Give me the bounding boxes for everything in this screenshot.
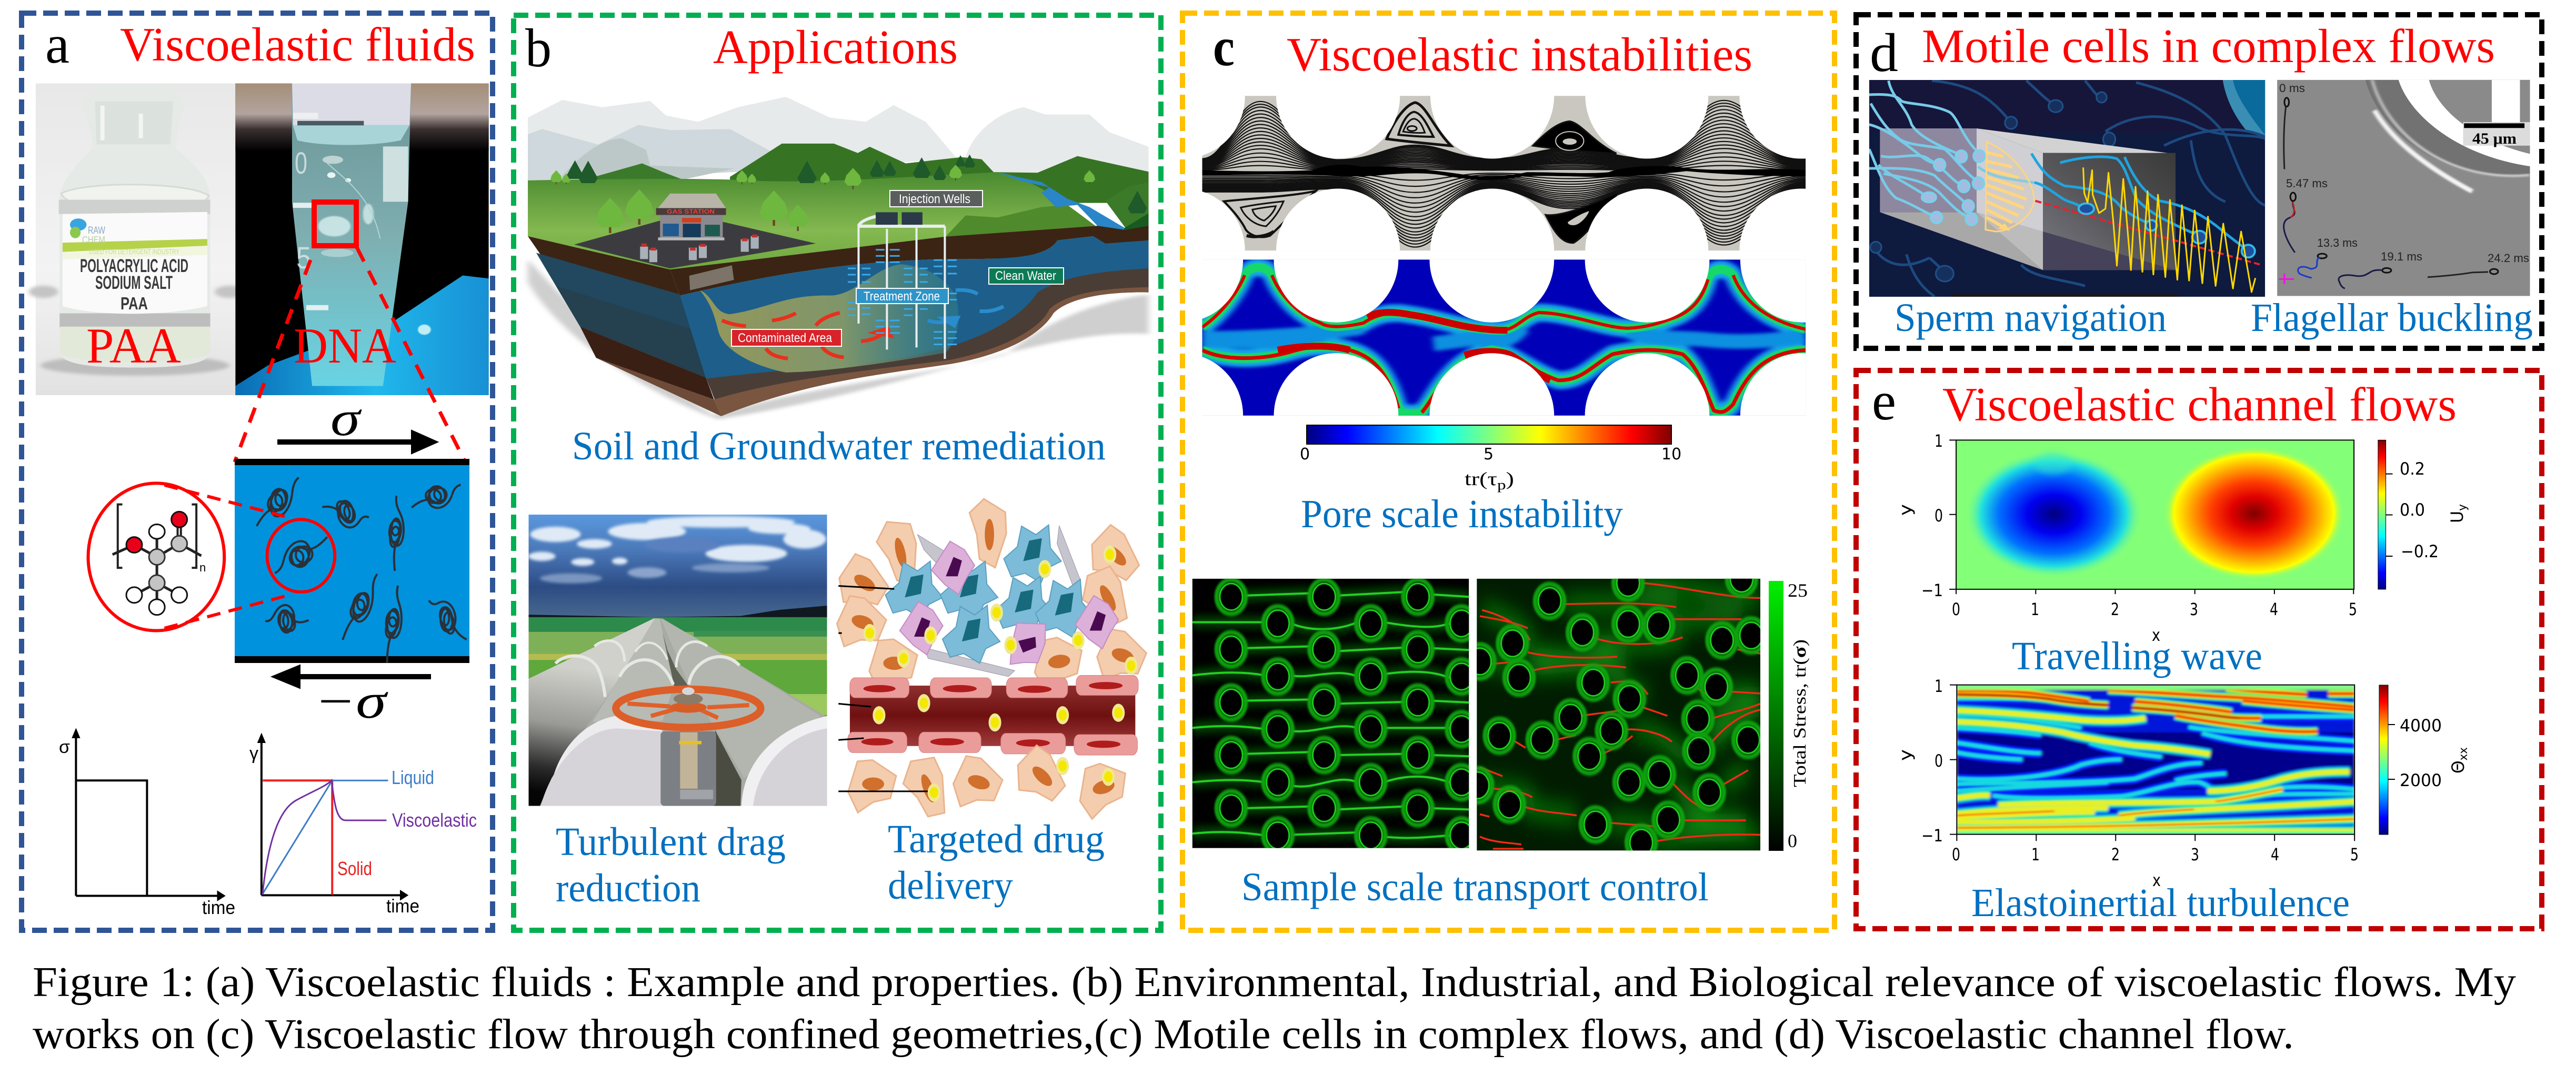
heatmap: travelling wave: 3 [2190,599,2198,619]
panel d: motile cells [1856,15,2542,348]
panel a letter: a [45,14,69,75]
panel c letter: c [1213,17,1235,77]
caption: pore scale instability: Pore scale instability [1301,492,1623,536]
buckling labels [2279,82,2529,265]
panel d frame [1856,15,2542,348]
heatmap: travelling wave: 4 [2270,599,2278,619]
panel d letter: d [1870,23,1898,83]
heatmap: elastoinertial turbulence: 4 [2271,845,2279,865]
buckling labels: 13.3 ms [2317,236,2358,249]
panel a frame [22,13,493,930]
label: gas station: GAS STATION [667,208,715,215]
heatmap: elastoinertial turbulence: x [2152,870,2161,890]
photo: PAA bottle [28,84,244,395]
caption: targeted drug delivery [888,817,1105,908]
vortices [1224,103,1620,243]
chart: strain response: γ [249,744,258,763]
bottle label text: SODIUM SALT [95,273,173,293]
heatmap: elastoinertial turbulence: 2000 [2400,770,2442,790]
arrow: positive shear [277,434,433,450]
streamlines plot [1202,96,1806,250]
panel e frame [1856,370,2542,929]
heatmap: elastoinertial turbulence [1896,676,2470,890]
heatmap: travelling wave: x [2152,625,2160,645]
tube tick digits [295,146,311,275]
illustration: sperm in microchannel [1869,80,2265,297]
illustration: tumour drug delivery [834,490,1149,827]
panel b title: Applications [713,21,958,74]
caption: turbulent drag reduction: Turbulent drag [556,820,786,864]
figure caption [33,959,2516,1058]
heatmap: elastoinertial turbulence: Θ [2448,760,2468,773]
heatmap: travelling wave: y [1896,504,1916,516]
heatmap: elastoinertial turbulence: 4000 [2400,716,2442,736]
heatmap: travelling wave: −1 [1921,580,1943,600]
caption: elastoinertial turbulence: Elastoinertial turbulence [1971,881,2350,925]
tube tick digits: 0 [295,146,307,180]
heatmap: elastoinertial turbulence: 0 [1952,845,1960,865]
bottle label text: USED FOR DETERGENT INDUSTRY [89,247,179,256]
label: Clean Water: Clean Water [995,269,1056,283]
colorbar: total stress: 0 [1788,830,1797,851]
tube tick digits: 5 [296,241,311,275]
colorbar: total stress: Total Stress, tr(σ) [1790,639,1810,787]
panel a title: Viscoelastic fluids [120,18,475,71]
chart: stress step: σ [59,737,70,757]
bottle label text: PAA [121,294,148,313]
colorbar: tr(tau_p): ) [1506,468,1514,489]
polymer molecule: n [199,561,206,574]
caption: sperm navigation: Sperm navigation [1895,296,2167,340]
heatmap: travelling wave: 2 [2111,599,2119,619]
chart: strain response: Viscoelastic [392,809,477,831]
heatmap: travelling wave: 1 [2031,599,2039,619]
heatmap: travelling wave: −0.2 [2401,541,2439,561]
photo: pipeline with valve [528,515,827,806]
colorbar: total stress [1769,580,1810,851]
stress field: ordered [1192,579,1476,852]
polymer molecule [113,505,206,615]
caption: turbulent drag reduction: reduction [556,866,700,910]
heatmap: elastoinertial turbulence: xx [2457,747,2470,760]
label: Contaminated Area: Contaminated Area [738,331,833,345]
photo: DNA tube [235,84,489,395]
heatmap: travelling wave: 0.2 [2400,459,2425,479]
stress colormap plot [1202,259,1806,416]
panel c: viscoelastic instabilities [1180,11,1837,933]
panel b: applications [514,15,1161,930]
figure caption: works on (c) Viscoelastic flow through confined geometries,(c) Motile cells in complex flows, and (d) Viscoelastic channel flow. [33,1011,2294,1058]
colorbar: tr(tau_p): 10 [1661,445,1681,464]
chart: stress step: time [202,897,235,918]
label DNA: DNA [294,318,396,374]
zoom dashed lines [235,247,465,462]
panel e letter: e [1872,371,1896,431]
panel b letter: b [525,18,552,78]
buckling labels: 0 ms [2279,82,2305,95]
heatmap: travelling wave: 0 [1934,506,1943,526]
heatmap: travelling wave [1896,431,2469,645]
heatmap: elastoinertial turbulence: −1 [1921,826,1943,846]
heatmap: elastoinertial turbulence: 0 [1934,751,1943,771]
chart: strain response: Liquid [392,767,434,788]
heatmap: elastoinertial turbulence: 1 [2031,845,2040,865]
heatmap: travelling wave: 5 [2349,599,2357,619]
buckling labels: 45 μm [2472,130,2517,147]
heatmap: elastoinertial turbulence: 5 [2350,845,2359,865]
heatmap: elastoinertial turbulence: 2 [2111,845,2120,865]
heatmap: travelling wave: 1 [1934,431,1943,451]
shear cell [235,459,469,663]
buckling labels: 19.1 ms [2381,250,2422,263]
polymer coils [253,478,467,663]
chart: strain response: time [386,895,419,917]
chart: strain response [249,733,477,917]
panel c title: Viscoelastic instabilities [1287,28,1752,81]
bottle label text: CHEM [82,235,105,245]
colorbar: tr(tau_p): 5 [1484,445,1494,464]
label PAA: PAA [86,318,181,374]
figure caption: Figure 1: (a) Viscoelastic fluids : Example and properties. (b) Environmental, Industrial, and Biological relevance of viscoelastic flows. My [33,959,2516,1006]
heatmap: elastoinertial turbulence: 1 [1934,676,1943,696]
caption: sample scale transport control: Sample scale transport control [1241,865,1709,909]
zoom square on tube [314,202,356,246]
panel c frame [1182,13,1835,930]
minus sigma: −σ [314,674,389,729]
pillars [1202,96,1806,250]
panel d title: Motile cells in complex flows [1922,19,2495,73]
arrow: negative shear [277,668,431,685]
sigma top: σ [330,391,362,446]
chart: strain response: Solid [337,858,372,879]
colorbar: tr(tau_p): tr(τ [1465,468,1490,489]
caption: targeted drug delivery: Targeted drug [888,817,1105,861]
colorbar: tr(tau_p): 0 [1300,445,1310,464]
caption: travelling wave: Travelling wave [2012,634,2262,678]
panel a: viscoelastic fluids [22,13,493,930]
micrograph: flagellar buckling [2277,80,2530,296]
caption: soil remediation: Soil and Groundwater remediation [572,424,1106,468]
panel e title: Viscoelastic channel flows [1942,378,2457,431]
bottle label text: RAW [88,225,105,236]
bottle label text: POLYACRYLIC ACID [80,256,188,276]
callout circles [88,483,335,631]
panel e: viscoelastic channel flows [1856,370,2542,929]
colorbar: tr(tau_p) [1300,425,1681,493]
illustration: groundwater remediation [528,97,1149,419]
chart: stress step [59,728,235,918]
colorbar: tr(tau_p): p [1497,477,1506,493]
heatmap: travelling wave: 0 [1952,599,1960,619]
caption: turbulent drag reduction [556,820,786,910]
heatmap: elastoinertial turbulence: 3 [2191,845,2199,865]
heatmap: travelling wave: 0.0 [2400,500,2425,520]
heatmap: travelling wave: y [2456,504,2469,511]
caption: flagellar buckling: Flagellar buckling [2251,296,2533,340]
bottle label text [80,225,188,313]
stress field: chaotic [1464,562,1766,860]
heatmap: travelling wave: U [2447,511,2467,523]
heatmap: elastoinertial turbulence: y [1896,749,1916,761]
label: Treatment Zone: Treatment Zone [864,289,940,304]
caption: targeted drug delivery: delivery [888,863,1013,908]
panel b frame [514,15,1161,930]
colorbar: total stress: 25 [1788,580,1808,601]
buckling labels: 24.2 ms [2488,252,2529,265]
buckling labels: 5.47 ms [2286,177,2328,190]
label: Injection Wells: Injection Wells [899,192,970,206]
